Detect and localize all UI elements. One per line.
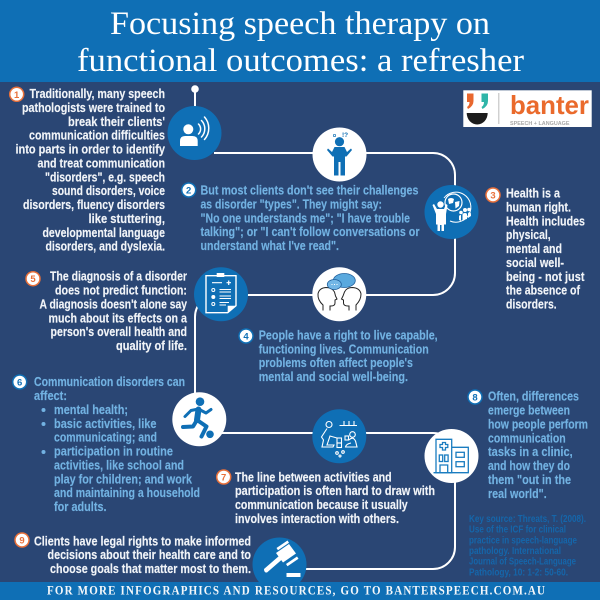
key source citation: pathology. International	[469, 546, 561, 557]
bullet list: activities, like school and	[54, 458, 184, 472]
badge 6: 6	[17, 378, 22, 388]
bullet list: mental health;	[54, 403, 128, 417]
text 5: diagnosis does not predict function: does not predict function:	[55, 284, 187, 298]
text 5: diagnosis does not predict function: A diagnosis doesn't alone say	[40, 298, 187, 312]
text 1: traditional approach: and treat communication	[38, 156, 165, 170]
text 8: clinic versus real world: and how they do	[488, 459, 570, 473]
footer band: FOR MORE INFOGRAPHICS AND RESOURCES, GO TO BANTERSPEECH.COM.AU	[47, 583, 545, 598]
key source citation: practice in speech-language	[469, 535, 577, 546]
header band with title: functional outcomes: a refresher	[77, 43, 524, 79]
key source citation: Use of the ICF for clinical	[469, 525, 566, 536]
text 8: clinic versus real world: emerge between	[488, 404, 570, 418]
text 2: client challenges: as disorder "types". They might say:	[200, 197, 382, 211]
text 3: health is a human right: human right.	[506, 200, 571, 214]
text 9: legal rights: choose goals that matter most to them.	[50, 562, 251, 576]
bullet list: communicating; and	[54, 431, 157, 445]
text 4: right to functioning lives: functioning lives. Communication	[259, 342, 429, 356]
key source citation: Pathology, 10: 1-2: 50-60.	[469, 567, 568, 578]
icon: hospital building	[424, 429, 478, 483]
icon: two heads talking	[312, 267, 366, 321]
text 5: diagnosis does not predict function: much about its effects on a	[48, 311, 188, 325]
text 1: traditional approach: communication difficulties	[29, 129, 165, 143]
bullet list: basic activities, like	[54, 417, 156, 431]
bullet list	[42, 403, 200, 514]
text 1: traditional approach: Traditionally, many speech	[30, 87, 165, 101]
text 4: right to functioning lives: problems often affect people's	[259, 356, 413, 370]
badge 5: 5	[30, 274, 36, 285]
icon: soccer player	[172, 392, 226, 446]
badge 7	[217, 470, 231, 484]
text 8: clinic versus real world	[468, 390, 588, 501]
text 3: health is a human right: physical,	[506, 228, 551, 242]
badge 4	[239, 329, 253, 343]
footer band	[0, 582, 600, 600]
badge 3: 3	[490, 190, 496, 202]
bullet list: and maintaining a household	[54, 486, 200, 500]
text 1: traditional approach: like stuttering,	[88, 212, 165, 226]
bullet list: play for children; and work	[54, 472, 193, 486]
badge 7: 7	[221, 472, 226, 484]
text 1: traditional approach: into parts in order to identify	[16, 142, 165, 156]
text 3: health is a human right: Health includes	[506, 214, 585, 228]
text 3: health is a human right: being - not just	[506, 270, 585, 284]
text 3: health is a human right	[486, 186, 585, 312]
logo: banter speech + language: banter	[510, 90, 589, 120]
text 2: client challenges: But most clients don't see their challenges	[200, 184, 418, 198]
badge 2: 2	[186, 186, 191, 196]
text 1: traditional approach: break their clients'	[68, 115, 165, 129]
icon: health as a human right	[424, 185, 478, 239]
text 2: client challenges: talking"; or "I can't follow conversations or	[200, 225, 420, 239]
badge 8: 8	[472, 392, 478, 404]
text 7: activities versus participation: communication because it usually	[235, 498, 408, 512]
text 9: legal rights: decisions about their health care and to	[48, 548, 251, 562]
text 7: activities versus participation: The line between activities and	[235, 470, 392, 484]
text 2: client challenges: "No one understands me"; "I have trouble	[200, 211, 410, 225]
text 6: what communication disorders affect: Communication disorders can	[34, 375, 185, 389]
key source citation	[469, 514, 586, 578]
text 3: health is a human right: the absence of	[506, 284, 581, 298]
text 7: activities versus participation	[217, 470, 435, 526]
header band with title: Focusing speech therapy on	[110, 6, 490, 42]
badge 2	[182, 183, 196, 197]
logo: banter speech + language: SPEECH + LANGUAGE	[510, 121, 570, 127]
text 1: traditional approach: developmental language	[42, 226, 165, 240]
text 1: traditional approach: disorders, and dyslexia.	[46, 240, 165, 254]
logo: banter speech + language	[463, 90, 592, 127]
bullet list: participation in routine	[54, 445, 173, 459]
badge 9	[15, 533, 29, 547]
icon: confused person shrugging: !?	[342, 132, 348, 139]
badge 1: 1	[14, 90, 20, 101]
text 8: clinic versus real world: real world".	[488, 487, 547, 501]
text 1: traditional approach: sound disorders, voice	[52, 184, 165, 198]
text 3: health is a human right: Health is a	[506, 186, 561, 200]
text 6: what communication disorders affect: affect:	[34, 389, 67, 403]
text 7: activities versus participation: involves interaction with others.	[235, 512, 399, 526]
icon: person speaking	[168, 106, 222, 160]
text 8: clinic versus real world: them "out in the	[488, 473, 571, 487]
header band with title	[0, 0, 600, 82]
badge 4: 4	[243, 332, 249, 342]
text 1: traditional approach: "disorders", e.g. speech	[45, 170, 165, 184]
text 1: traditional approach	[10, 87, 165, 254]
text 1: traditional approach: pathologists were trained to	[22, 101, 165, 115]
text 4: right to functioning lives	[239, 328, 438, 384]
badge 5	[26, 272, 40, 286]
text 5: diagnosis does not predict function: quality of life.	[116, 339, 187, 353]
badge 1	[10, 87, 24, 101]
text 9: legal rights	[15, 533, 251, 576]
text 5: diagnosis does not predict function: person's overall health and	[50, 325, 187, 339]
badge 9: 9	[19, 536, 25, 546]
text 5: diagnosis does not predict function: The diagnosis of a disorder	[50, 270, 187, 284]
bullet list: for adults.	[54, 500, 106, 514]
text 2: client challenges: understand what I've read".	[200, 239, 339, 253]
text 8: clinic versus real world: Often, differences	[488, 390, 579, 404]
text 8: clinic versus real world: communication	[488, 431, 566, 445]
icon: gavel	[252, 538, 306, 592]
text 3: health is a human right: disorders.	[506, 298, 557, 312]
text 1: traditional approach: disorders, fluency disorders	[23, 198, 165, 212]
badge 6	[13, 375, 27, 389]
text 3: health is a human right: social well-	[506, 256, 564, 270]
text 9: legal rights: Clients have legal rights to make informed	[34, 534, 251, 548]
connector path	[191, 85, 455, 569]
icon: confused person shrugging	[312, 128, 366, 182]
text 8: clinic versus real world: tasks in a clinic,	[488, 445, 573, 459]
text 3: health is a human right: mental and	[506, 242, 562, 256]
text 2: client challenges	[182, 183, 420, 253]
text 5: diagnosis does not predict function	[26, 270, 188, 353]
text 6: what communication disorders affect	[13, 375, 200, 514]
text 7: activities versus participation: participation is often hard to draw with	[235, 484, 435, 498]
text 4: right to functioning lives: People have a right to live capable,	[259, 328, 438, 342]
text 4: right to functioning lives: mental and social well-being.	[259, 370, 408, 384]
icon: clipboard with checklist	[194, 267, 248, 321]
icon: adult and child playing	[312, 409, 366, 463]
